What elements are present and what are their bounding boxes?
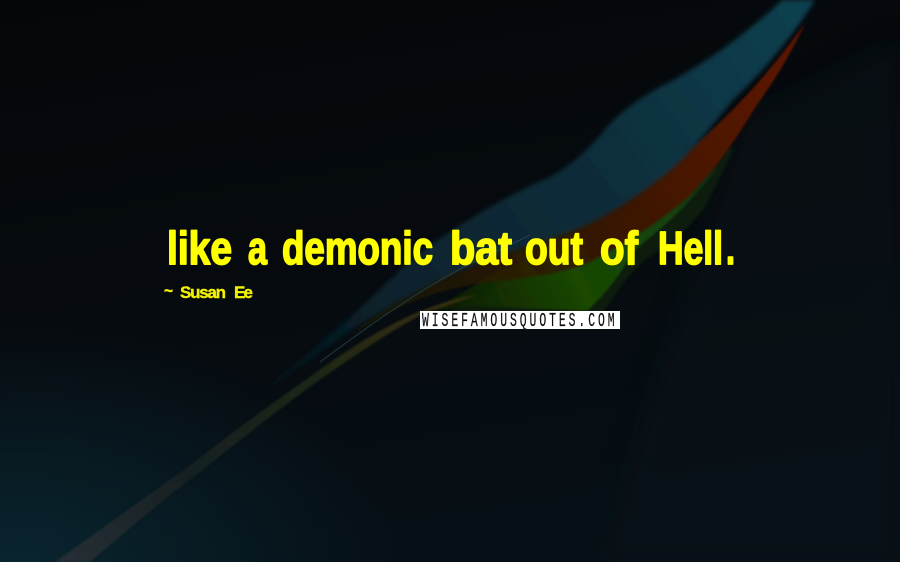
quote text [167, 222, 735, 274]
attribution: ~ [164, 281, 173, 300]
quote text: bat [450, 222, 512, 274]
quote text: out [525, 222, 583, 274]
quote text: . [726, 222, 735, 274]
dark green outer band [440, 145, 735, 326]
attribution: Ee [234, 283, 253, 302]
attribution: Susan [180, 283, 226, 302]
quote text: of [600, 222, 639, 274]
quote text: a [248, 222, 267, 274]
quote text: like [167, 222, 232, 274]
quote text: demonic [282, 222, 433, 274]
long streak [55, 294, 480, 562]
green band [430, 165, 720, 312]
teal band [245, 0, 815, 405]
watermark: WISEFAMOUSQUOTES.COM [422, 310, 618, 332]
red band [350, 22, 806, 336]
light crease [320, 235, 530, 362]
attribution [164, 281, 253, 302]
quote text: Hell [658, 222, 723, 274]
